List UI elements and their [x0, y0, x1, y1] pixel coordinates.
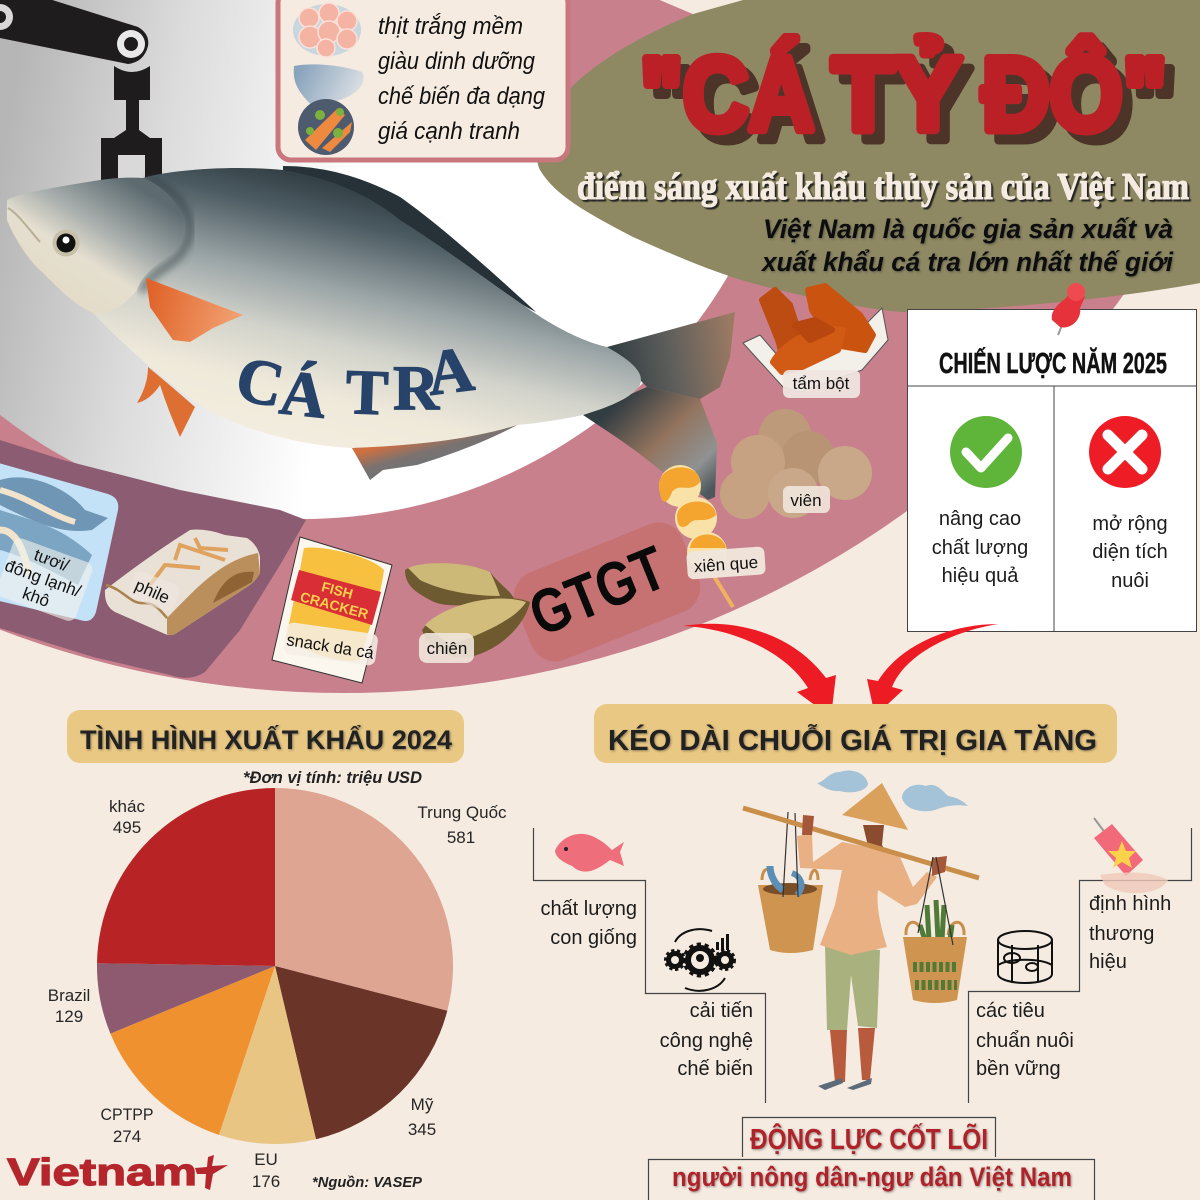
label: balls: viên — [790, 491, 822, 510]
core drivers label: ĐỘNG LỰC CỐT LÕI — [750, 1122, 988, 1156]
icon: snack bag — [272, 537, 392, 683]
label: skewer — [686, 546, 766, 580]
text: brand: định hình — [1089, 893, 1171, 915]
icon: clouds — [817, 770, 968, 811]
pie chart — [97, 788, 453, 1144]
dark mauve band — [0, 440, 306, 678]
ventral fin — [137, 367, 195, 437]
feature list: chế biến đa dạng — [378, 83, 546, 110]
title: TỶ — [842, 46, 972, 163]
intro text — [760, 214, 1173, 277]
pants — [825, 945, 880, 1030]
pie labels: khác — [109, 797, 145, 816]
legs — [830, 1028, 875, 1082]
text: processing tech: chế biến — [677, 1058, 753, 1080]
pie labels: 129 — [55, 1007, 83, 1026]
export heading — [67, 710, 464, 763]
label: fried: chiên — [427, 639, 467, 658]
text: sustainable standards: các tiêu — [976, 1000, 1045, 1022]
icon: fish balls — [720, 409, 872, 519]
right stairs — [968, 828, 1192, 1103]
icon: snack bag: CRACKER — [298, 588, 370, 622]
text: processing tech — [660, 1000, 753, 1080]
label: fillet — [126, 569, 181, 613]
right basket — [903, 857, 967, 1003]
GTGT tag: GTGT — [520, 533, 676, 650]
title: ĐÔ" — [982, 36, 1167, 153]
arrow: right red — [867, 624, 998, 716]
unit note: *Đơn vị tính: triệu USD — [243, 768, 422, 787]
strategy left text: chất lượng — [932, 537, 1028, 559]
export heading: TÌNH HÌNH XUẤT KHẨU 2024 — [80, 724, 452, 755]
text: brand: hiệu — [1089, 951, 1127, 973]
label: fillet: phile — [132, 576, 172, 608]
tail upper lobe — [607, 312, 735, 399]
feature list — [378, 13, 546, 145]
text: sustainable standards: chuẩn nuôi — [976, 1030, 1074, 1052]
dorsal ridge — [283, 166, 536, 312]
gill shadow — [142, 178, 190, 292]
farmer illustration — [743, 783, 979, 1090]
title: ĐÔ" — [992, 46, 1177, 163]
left stairs — [534, 828, 766, 1103]
label: balls — [783, 486, 830, 513]
pectoral fin — [146, 278, 243, 342]
pie labels: 581 — [447, 828, 475, 847]
body — [93, 168, 641, 448]
text: seed quality — [540, 898, 637, 949]
text: seed quality: con giống — [550, 927, 637, 949]
inner grey-white circle — [0, 0, 796, 519]
pie labels: 176 — [252, 1172, 280, 1191]
strategy panel — [907, 310, 1197, 632]
fish name: CÁTRA — [230, 333, 478, 432]
label: frozen: khô — [20, 584, 52, 611]
text: sustainable standards: bền vững — [976, 1058, 1061, 1080]
pink wedge top — [560, 0, 693, 100]
pie labels: 274 — [113, 1127, 141, 1146]
value chain heading: KÉO DÀI CHUỖI GIÁ TRỊ GIA TĂNG — [608, 723, 1097, 757]
title: "CÁ — [650, 47, 824, 163]
icon: fried wings — [743, 286, 888, 392]
olive title panel — [537, 0, 1200, 312]
strategy right text: nuôi — [1111, 570, 1149, 592]
pie labels: Mỹ — [411, 1095, 434, 1114]
icon: snack bag: FISH — [320, 578, 355, 602]
farmers label — [648, 1160, 1094, 1200]
icon: fish fillet — [294, 64, 364, 115]
left basket — [758, 812, 823, 953]
icon: fish rolls plate — [293, 3, 361, 57]
title: "CÁ — [640, 37, 814, 153]
pie labels: Trung Quốc — [417, 803, 507, 822]
label: fried — [419, 633, 474, 663]
hand left — [802, 815, 814, 835]
title — [640, 36, 1177, 163]
strategy right text: diện tích — [1092, 541, 1168, 563]
pie labels: 495 — [113, 818, 141, 837]
feature list: giá cạnh tranh — [378, 118, 520, 145]
icon: frozen fish box — [0, 462, 118, 621]
shirt — [797, 834, 937, 955]
text: brand: thương — [1089, 923, 1154, 945]
label: snack: snack da cá — [285, 630, 376, 663]
logo Vietnam+: Vietnam — [7, 1152, 197, 1194]
icon: price tag — [1094, 818, 1168, 893]
head — [7, 178, 184, 313]
value chain heading — [594, 704, 1117, 763]
text: processing tech: cải tiến — [690, 1000, 753, 1022]
pole — [743, 808, 979, 878]
icon: gears — [666, 929, 734, 991]
label: frozen — [0, 536, 95, 623]
pie labels: EU — [254, 1150, 278, 1169]
strategy right text: mở rộng — [1092, 513, 1168, 535]
label: breaded — [783, 370, 860, 398]
feature box — [278, 0, 568, 160]
cream corner top right — [660, 0, 743, 14]
text: brand — [1089, 893, 1171, 973]
source note: *Nguồn: VASEP — [312, 1174, 423, 1191]
icon: fish tank — [998, 931, 1052, 983]
icon: pink fish — [555, 834, 624, 872]
strategy left text: hiệu quả — [942, 565, 1019, 587]
pie labels: Brazil — [48, 986, 90, 1005]
icon: green check — [950, 416, 1022, 488]
title: TỶ — [832, 36, 962, 153]
label: skewer: xiên que — [693, 553, 759, 576]
pie labels: 345 — [408, 1120, 436, 1139]
feature list: thịt trắng mềm — [378, 13, 523, 40]
pie labels — [48, 797, 507, 1191]
strategy left text — [932, 508, 1028, 587]
icon: skewer — [659, 465, 733, 607]
strategy right text — [1092, 513, 1168, 592]
feature list: giàu dinh dưỡng — [378, 48, 536, 75]
hat — [842, 783, 908, 830]
icon: fried fish — [405, 563, 530, 658]
icon: fish dish — [298, 99, 354, 155]
icon: fillet block — [105, 530, 260, 635]
hand right — [932, 856, 947, 876]
strategy left text: nâng cao — [939, 508, 1021, 530]
mouth line — [8, 208, 40, 242]
text: processing tech: công nghệ — [660, 1030, 753, 1052]
text: seed quality: chất lượng — [540, 898, 637, 920]
arrow: left red — [683, 624, 836, 717]
intro text: xuất khẩu cá tra lớn nhất thế giới — [760, 247, 1173, 277]
label: frozen: tươi/ — [31, 545, 72, 575]
icon: red pin — [1052, 283, 1085, 335]
robot arm — [0, 0, 162, 185]
tail lower lobe — [583, 387, 717, 500]
text: sustainable standards — [976, 1000, 1074, 1080]
label: frozen: đông lạnh/ — [2, 556, 84, 601]
icon: red cross — [1089, 416, 1161, 488]
eye — [52, 230, 80, 256]
fish illustration — [7, 166, 735, 500]
pink ring — [0, 0, 1200, 693]
label: breaded: tẩm bột — [793, 374, 850, 393]
anal fin — [352, 425, 517, 480]
sandals — [818, 1078, 872, 1090]
face and neck — [862, 825, 886, 852]
intro text: Việt Nam là quốc gia sản xuất và — [763, 214, 1173, 244]
farmers label: người nông dân-ngư dân Việt Nam — [672, 1162, 1072, 1192]
logo Vietnam+ — [7, 1152, 228, 1194]
pie labels: CPTPP — [100, 1105, 154, 1124]
